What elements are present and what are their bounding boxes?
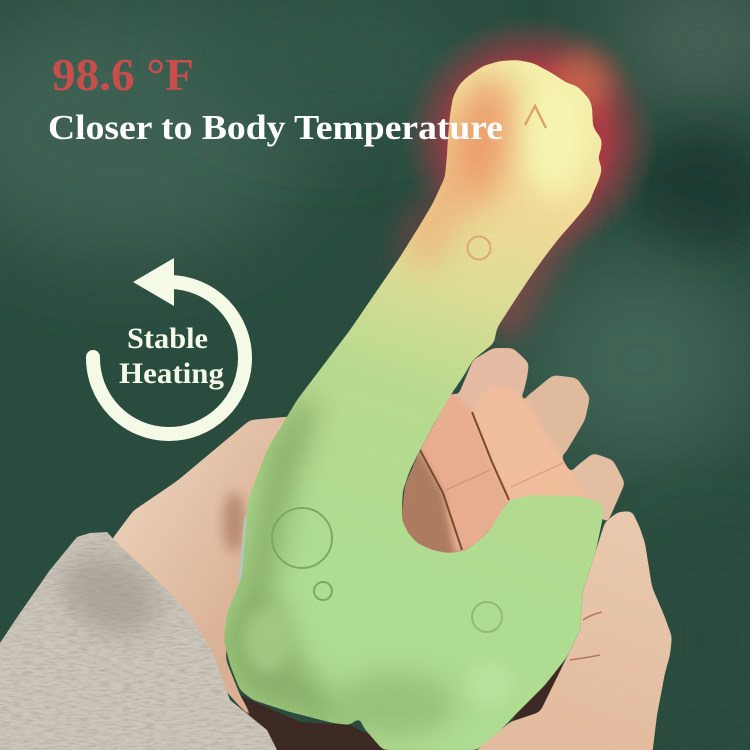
right bubble — [472, 602, 502, 632]
left palm — [110, 416, 295, 732]
icon: chevron up button — [525, 106, 546, 128]
heat glow — [395, 16, 658, 345]
sweater sleeve — [0, 520, 290, 750]
heating cycle arrow — [93, 258, 245, 434]
small bubble — [314, 582, 332, 600]
temperature heading: 98.6 °F — [52, 49, 194, 100]
stable heating label — [119, 322, 224, 390]
subheading: Closer to Body Temperature — [48, 108, 503, 147]
back fingers — [400, 348, 625, 556]
back finger: third — [525, 375, 590, 457]
front hand right — [470, 511, 672, 750]
front finger — [472, 386, 587, 502]
icon: power button circle — [468, 236, 490, 260]
back finger: fourth — [572, 453, 625, 524]
large bubble — [272, 508, 332, 568]
back finger: top — [458, 348, 529, 412]
dark gap behind device — [240, 655, 565, 750]
device body and shading — [215, 60, 603, 750]
middle finger — [420, 391, 510, 553]
stable heating label: Stable — [127, 322, 208, 355]
device: green dinosaur warmer — [215, 60, 603, 750]
far left palm shadow — [400, 450, 475, 556]
finger creases — [420, 412, 563, 550]
stable heating label: Heating — [119, 357, 224, 390]
